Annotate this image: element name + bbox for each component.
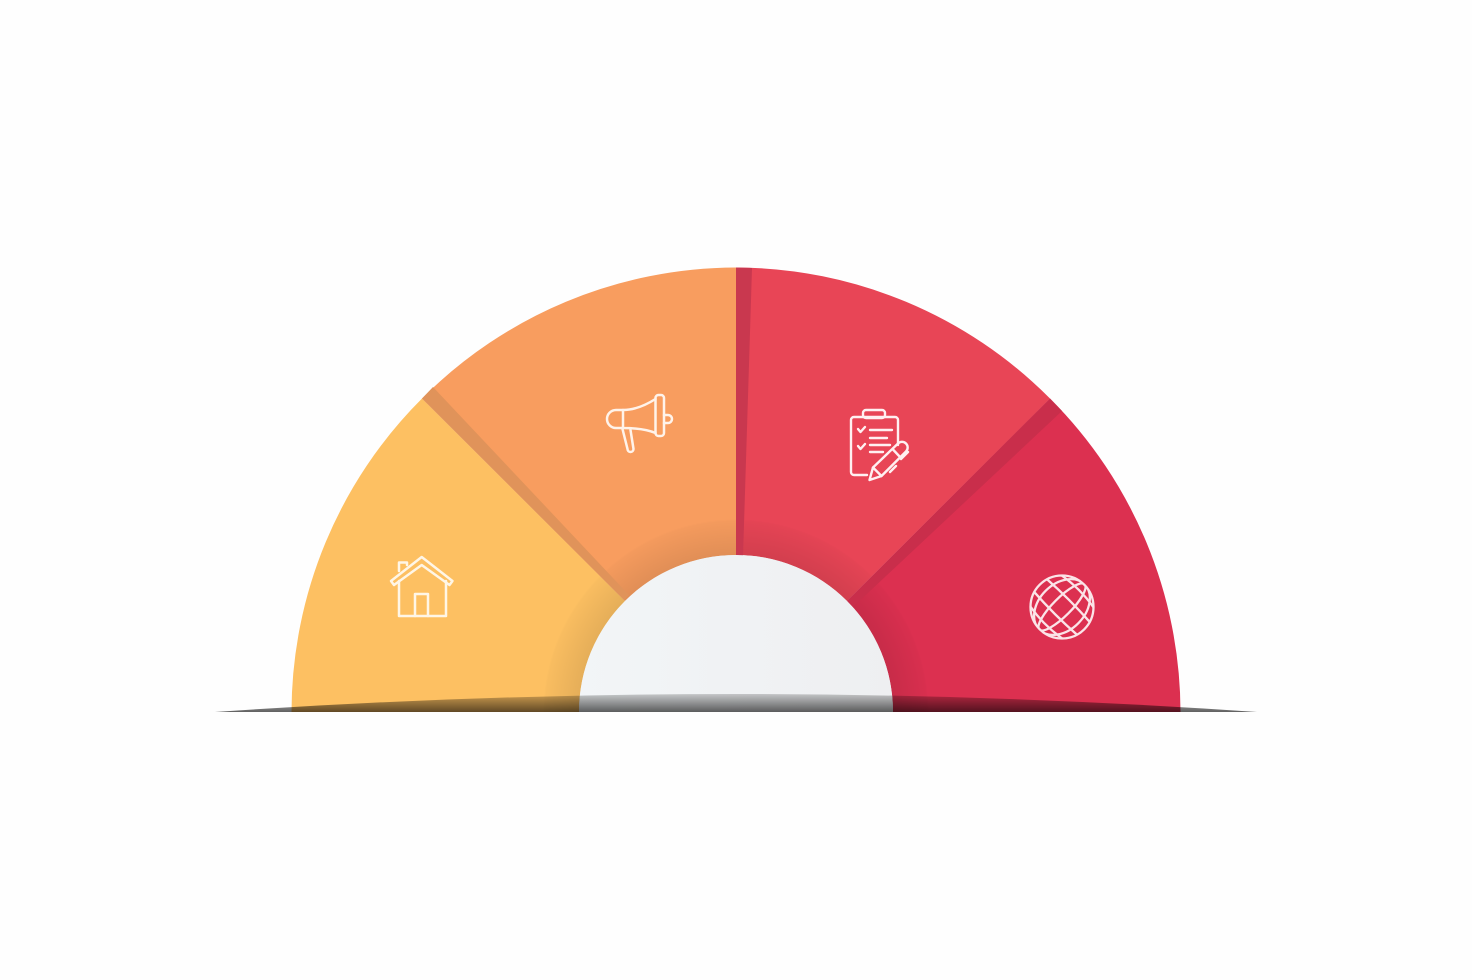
segment: yellow	[292, 398, 625, 712]
icon: globe	[1029, 574, 1095, 640]
icon: megaphone	[607, 395, 672, 452]
semicircle infographic	[216, 268, 1256, 712]
segment: red	[736, 268, 1050, 601]
divider shadow: yellow / orange	[422, 387, 629, 600]
floor shadow	[215, 694, 1257, 712]
centre semicircle	[579, 555, 893, 712]
divider shadow: orange / red	[736, 268, 752, 556]
segment: dark red	[847, 398, 1180, 712]
icon: clipboard and pen	[851, 410, 908, 480]
segment: orange	[422, 268, 736, 601]
inner halo shadow	[543, 519, 929, 712]
divider shadow: red / dark red	[847, 398, 1062, 607]
icon: house	[391, 557, 452, 616]
